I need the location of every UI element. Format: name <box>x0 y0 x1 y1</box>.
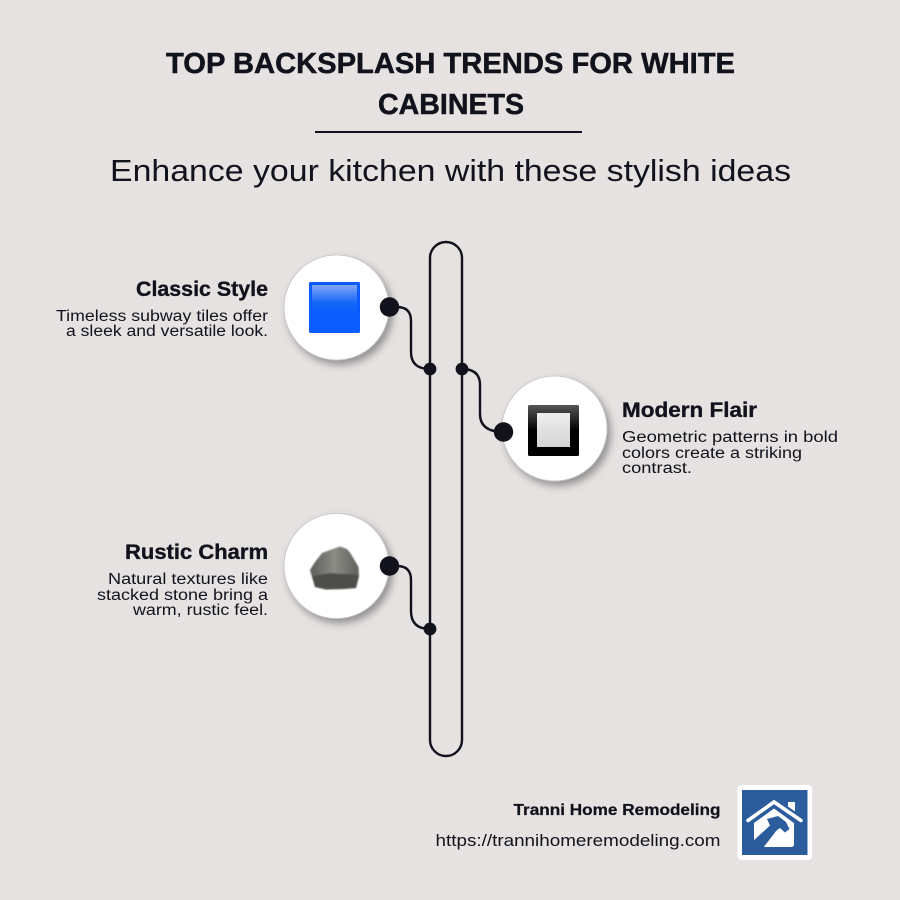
panel: classic style <box>56 255 436 375</box>
footer: company name: Tranni Home Remodeling <box>514 802 720 819</box>
heading: rustic charm: Rustic Charm <box>125 541 268 564</box>
logo <box>738 785 812 860</box>
icon circle: classic style <box>284 255 389 360</box>
panel: rustic charm <box>97 514 436 635</box>
text: modern flair description <box>622 429 838 477</box>
text: rustic charm description: Natural textures like <box>108 571 268 588</box>
icon: black framed square <box>528 405 579 456</box>
panel: modern flair <box>456 363 838 481</box>
connector: modern flair <box>456 363 513 442</box>
title: TOP BACKSPLASH TRENDS FOR WHITE <box>166 48 735 80</box>
text: rustic charm description: warm, rustic feel. <box>132 602 268 619</box>
text: rustic charm description <box>97 571 268 619</box>
central vertical track <box>430 242 462 756</box>
text: classic style description <box>56 308 268 340</box>
icon circle: rustic charm <box>284 514 389 618</box>
icon circle: modern flair <box>502 376 607 481</box>
title <box>166 48 735 121</box>
subtitle: Enhance your kitchen with these stylish ideas <box>110 153 791 188</box>
heading: classic style: Classic Style <box>136 278 268 301</box>
heading: modern flair: Modern Flair <box>622 399 757 422</box>
text: classic style description: a sleek and versatile look. <box>66 323 268 340</box>
text: modern flair description: contrast. <box>622 460 692 477</box>
icon: blue square tile <box>309 282 360 333</box>
icon: stone <box>310 546 359 590</box>
text: rustic charm description: stacked stone bring a <box>97 587 268 604</box>
text: modern flair description: colors create a striking <box>622 445 802 462</box>
footer: website url: https://trannihomeremodeling.com <box>436 832 720 850</box>
title: CABINETS <box>378 89 524 121</box>
text: classic style description: Timeless subway tiles offer <box>56 308 268 325</box>
text: modern flair description: Geometric patterns in bold <box>622 429 838 446</box>
connector: rustic charm <box>380 556 436 635</box>
connector: classic style <box>380 297 436 375</box>
